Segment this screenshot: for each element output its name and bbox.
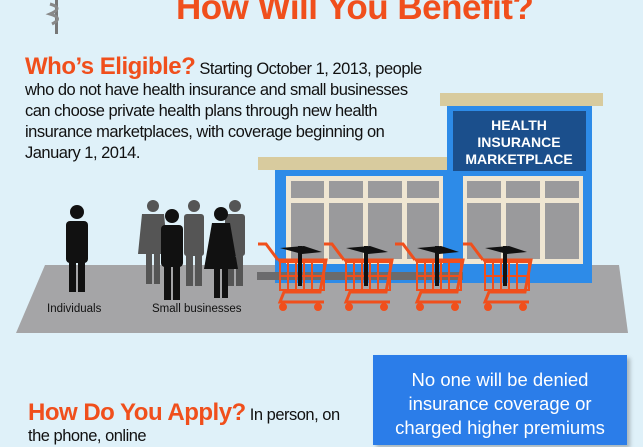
- text block: who's eligible: insurance marketplaces, with coverage beginning on: [25, 123, 384, 141]
- building: HEALTH: [491, 117, 547, 133]
- text block: who's eligible: [25, 53, 422, 162]
- text block: who's eligible: Who’s Eligible? Starting October 1, 2013, people: [25, 53, 422, 80]
- building: MARKETPLACE: [465, 151, 573, 167]
- text block: who's eligible: who do not have health insurance and small businesses: [25, 81, 408, 99]
- text block: how do you apply: [28, 399, 340, 445]
- building: INSURANCE: [477, 134, 561, 150]
- icon: caduceus top: [46, 0, 59, 34]
- text block: how do you apply: How Do You Apply? In person, on: [28, 399, 340, 426]
- illustration: marketplace scene: [16, 93, 628, 333]
- people: individual: [66, 205, 88, 292]
- carts: [258, 244, 531, 311]
- people: small businesses: [138, 200, 245, 300]
- illustration: marketplace scene: Small businesses: [152, 303, 242, 315]
- text block: how do you apply: the phone, online: [28, 427, 146, 445]
- callout: no one denied: No one will be denied: [412, 369, 588, 390]
- labels: Individuals: [47, 303, 102, 315]
- callout: no one denied: [373, 355, 627, 445]
- floor: [16, 265, 628, 333]
- building: [257, 93, 603, 283]
- callout: no one denied: charged higher premiums: [395, 417, 605, 438]
- text block: who's eligible: January 1, 2014.: [25, 144, 140, 162]
- callout: no one denied: insurance coverage or: [408, 393, 592, 414]
- text block: who's eligible: can choose private health plans through new health: [25, 102, 377, 120]
